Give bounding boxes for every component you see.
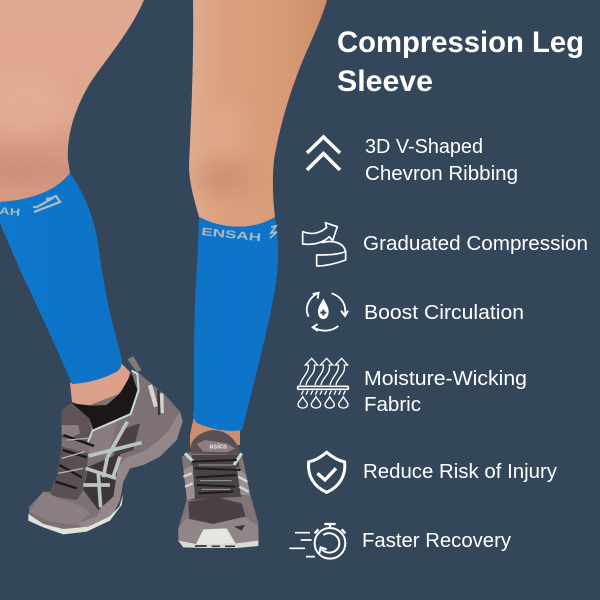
icon: wrapped arrow band — [303, 223, 346, 266]
outsole — [178, 541, 258, 548]
toe — [178, 517, 258, 544]
toe cap white — [196, 528, 236, 544]
side panels — [183, 465, 195, 500]
right sleeve — [193, 217, 278, 431]
toe cap — [29, 492, 90, 525]
sleeve logo right — [270, 226, 277, 238]
label: chevron ribbing: 3D V-Shaped — [365, 136, 483, 158]
right ankle — [190, 416, 240, 450]
shoe body — [178, 452, 258, 547]
feature: graduated compression — [303, 223, 588, 266]
label: moisture-wicking fabric: Fabric — [364, 394, 421, 416]
icon: double chevron — [307, 137, 340, 170]
label: moisture-wicking fabric — [364, 368, 527, 416]
label: graduated compression: Graduated Compression — [363, 233, 588, 255]
label: reduce risk of injury: Reduce Risk of Injury — [363, 461, 557, 483]
icon: arrows through fabric above droplets — [298, 358, 348, 408]
feature: reduce risk of injury — [308, 452, 557, 492]
right leg skin — [185, 0, 330, 235]
lace area — [190, 455, 242, 500]
icon: stopwatch with speed lines — [289, 524, 345, 559]
left leg skin — [0, 0, 150, 210]
mint collar — [185, 453, 242, 465]
label: chevron ribbing: Chevron Ribbing — [365, 163, 518, 185]
forefoot dark mesh — [50, 447, 88, 500]
feature: moisture-wicking — [298, 358, 527, 416]
left ankle — [70, 362, 130, 408]
heel pull tab — [127, 356, 142, 372]
left shoe — [28, 356, 183, 534]
shoe logo: asics — [209, 444, 227, 451]
upper rear panel — [127, 378, 179, 453]
mint trim — [88, 371, 139, 442]
title: Sleeve — [337, 65, 433, 98]
outsole — [28, 494, 123, 534]
feature: boost circulation — [307, 293, 524, 331]
label: chevron ribbing — [365, 136, 518, 185]
vamp mesh — [188, 497, 246, 525]
photo: legs wearing compression sleeves and running shoes — [0, 0, 330, 548]
label: moisture-wicking fabric: Moisture-Wicking — [364, 368, 527, 390]
midsole — [77, 412, 183, 532]
collar — [62, 404, 92, 443]
feature: faster recovery — [289, 524, 511, 559]
label: boost circulation: Boost Circulation — [364, 302, 524, 324]
title — [337, 26, 584, 98]
icon: blood drop with circular arrows — [307, 293, 348, 331]
instep panel — [88, 422, 117, 455]
sleeve logo left — [33, 196, 60, 212]
sleeve brand text right: ENSAH — [201, 226, 262, 244]
laces — [55, 435, 94, 488]
sock — [72, 373, 137, 430]
logo plate — [197, 440, 235, 452]
label: faster recovery: Faster Recovery — [362, 530, 511, 552]
right shoe — [178, 430, 258, 548]
title: Compression Leg — [337, 26, 584, 59]
feature: chevron ribbing — [307, 136, 518, 185]
asics stripes — [83, 422, 142, 507]
tongue — [190, 430, 241, 455]
rear stripes — [150, 385, 162, 413]
left sleeve — [0, 173, 122, 384]
shoe body — [28, 371, 183, 534]
laces — [192, 460, 241, 493]
icon: shield with check — [308, 452, 345, 492]
